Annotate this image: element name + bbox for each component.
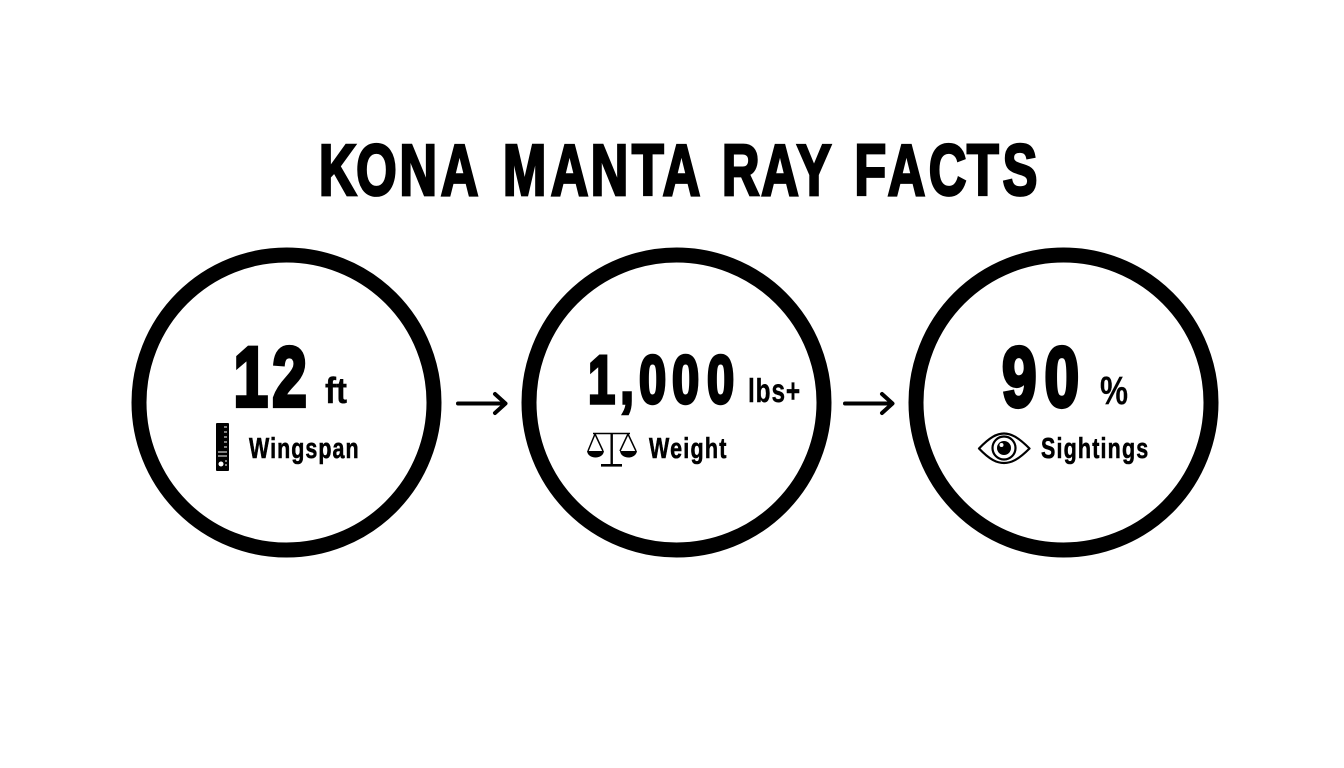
icon: balance scale <box>587 433 637 467</box>
panel: sightings <box>916 255 1211 550</box>
title: KONA MANTA RAY FACTS <box>319 131 1037 211</box>
arrow: wingspan to weight <box>458 394 506 413</box>
stat value: 1,000 lbs+: 1,000 <box>588 341 734 418</box>
stat value: 1,000 lbs+ <box>588 341 801 418</box>
stat value: 12 ft: 12 <box>233 330 307 424</box>
label: wingspan: Wingspan <box>249 433 360 465</box>
icon: ruler <box>216 423 229 471</box>
label: weight: Weight <box>649 433 728 465</box>
panel: wingspan <box>139 255 434 550</box>
stat value: 90 % <box>1002 330 1128 424</box>
arrow: weight to sightings <box>845 394 892 413</box>
circle outline: weight <box>529 255 824 550</box>
circle outline: wingspan <box>139 255 434 550</box>
stat value: 90 %: 90 <box>1002 330 1079 424</box>
label: sightings: Sightings <box>1041 433 1149 465</box>
stat value: 1,000 lbs+: lbs+ <box>748 374 801 410</box>
panel: weight <box>529 255 824 550</box>
stat value: 12 ft <box>233 330 347 424</box>
stat value: 90 %: % <box>1100 369 1128 413</box>
circle outline: sightings <box>916 255 1211 550</box>
stat value: 12 ft: ft <box>325 370 347 411</box>
icon: eye <box>979 434 1030 463</box>
